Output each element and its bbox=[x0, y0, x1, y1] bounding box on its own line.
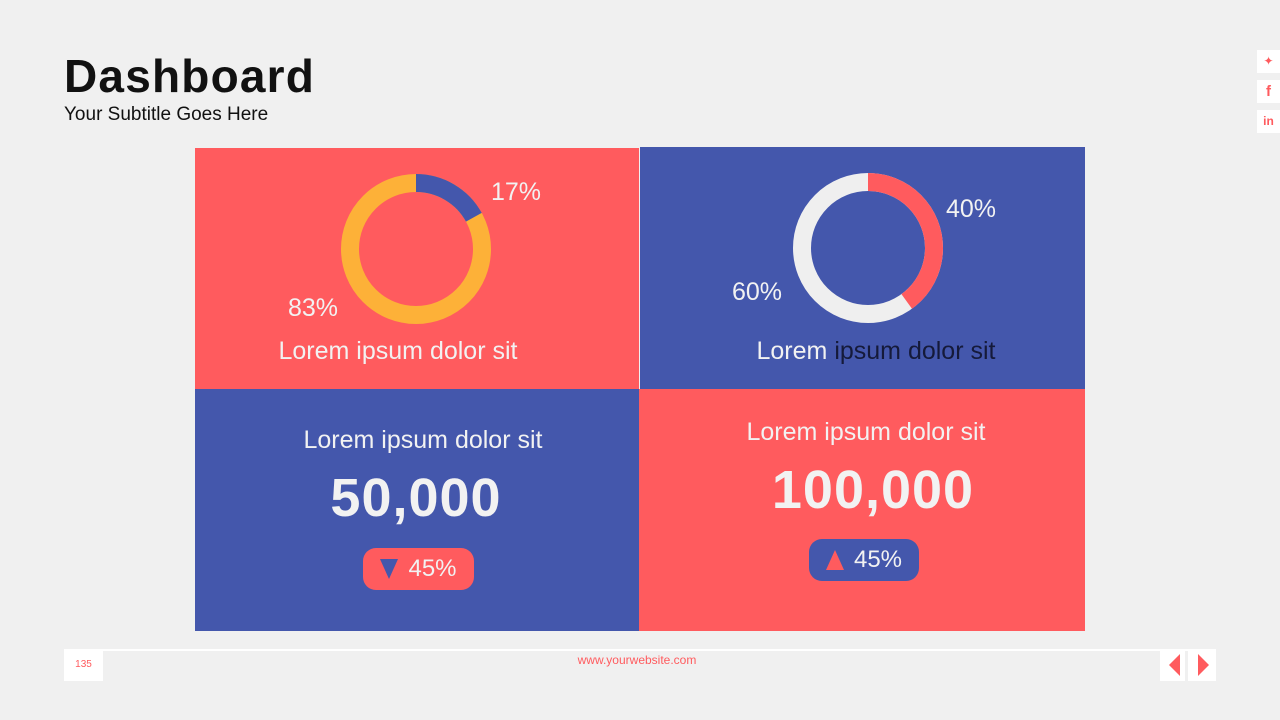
icon: twitter bbox=[1257, 50, 1280, 73]
big number: 50,000 bbox=[330, 468, 502, 528]
arrow: prev bbox=[1160, 649, 1185, 681]
footer line bbox=[64, 649, 1216, 651]
label 17%: 17% bbox=[491, 178, 541, 206]
pill: up 45% bbox=[809, 539, 919, 581]
icon: linkedin bbox=[1257, 110, 1280, 133]
panel: top-left donut bbox=[195, 148, 639, 389]
title: Dashboard bbox=[64, 50, 315, 102]
nav arrows bbox=[1160, 651, 1216, 681]
panel: bottom-left stat bbox=[195, 389, 639, 631]
icon: facebook bbox=[1257, 80, 1280, 103]
icon: twitter: ✦ bbox=[1263, 54, 1274, 68]
caption: Lorem ipsum dolor sit bbox=[278, 337, 517, 365]
page number bbox=[64, 649, 103, 681]
subtitle: Your Subtitle Goes Here bbox=[64, 104, 268, 125]
label 40%: 40% bbox=[946, 195, 996, 223]
pill: down 45% bbox=[363, 548, 474, 590]
label 60%: 60% bbox=[732, 278, 782, 306]
social icons bbox=[1257, 50, 1280, 133]
caption: Lorem ipsum dolor sit bbox=[756, 337, 995, 365]
panel: top-right donut bbox=[640, 147, 1085, 389]
caption: Lorem ipsum dolor sit bbox=[746, 418, 985, 446]
panel: bottom-right stat bbox=[639, 389, 1085, 631]
donut chart 40/60 bbox=[793, 173, 943, 323]
website: www.yourwebsite.com bbox=[578, 653, 696, 667]
big number: 100,000 bbox=[772, 460, 974, 520]
caption: Lorem ipsum dolor sit bbox=[304, 426, 542, 454]
icon: facebook: f bbox=[1266, 83, 1271, 100]
pill: up 45%: 45% bbox=[854, 546, 902, 573]
icon: linkedin: in bbox=[1263, 114, 1274, 128]
donut chart 17/83 bbox=[341, 174, 491, 324]
page number: 135 bbox=[75, 659, 92, 670]
pill: down 45%: 45% bbox=[408, 555, 457, 582]
label 83%: 83% bbox=[288, 294, 338, 322]
arrow: next bbox=[1188, 649, 1216, 681]
